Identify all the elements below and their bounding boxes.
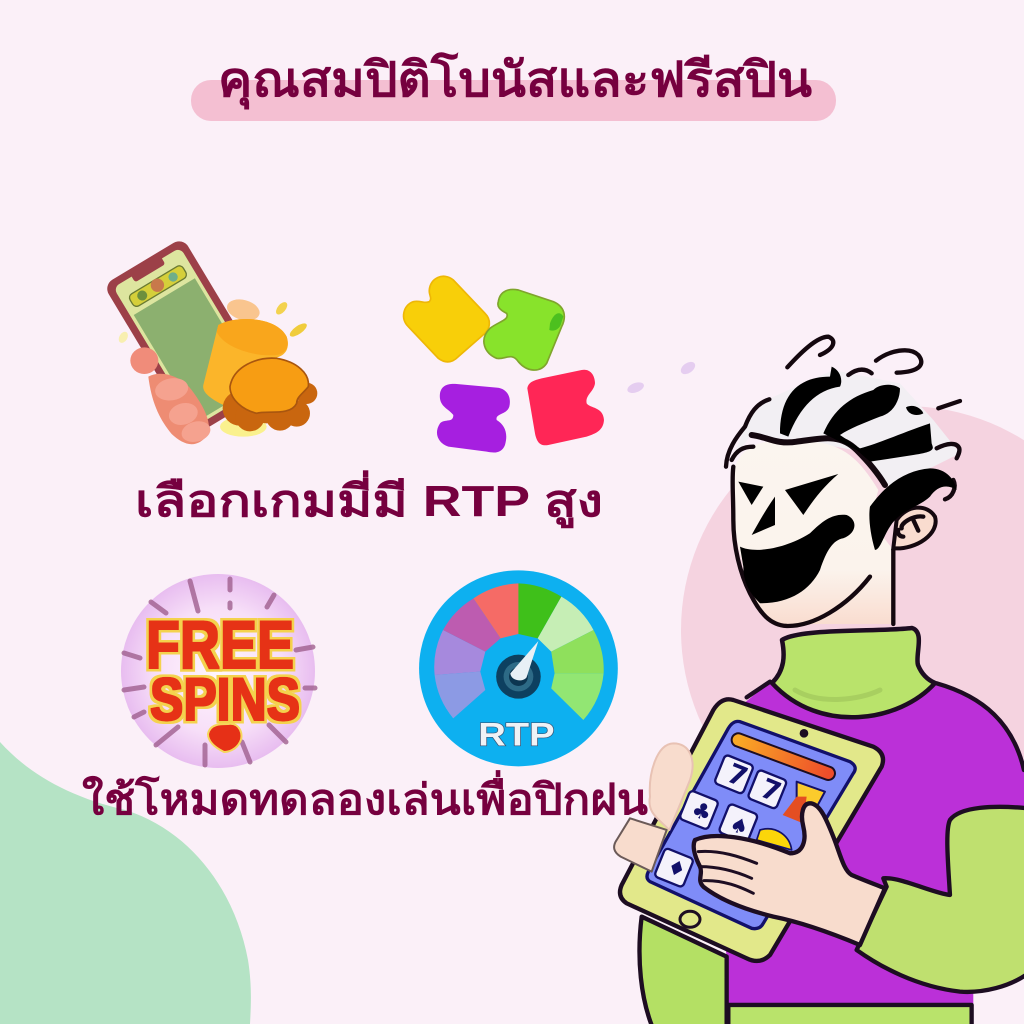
tablet: 7 xyxy=(756,773,785,809)
icon: phone with coins xyxy=(103,237,317,445)
head with stylised hair and face xyxy=(726,337,960,626)
decorative green blob xyxy=(0,742,251,1024)
hands xyxy=(614,743,885,945)
title banner: คุณสมปิติโบนัสและฟรีสปิน xyxy=(218,51,812,110)
tablet: ♣ xyxy=(688,797,715,828)
tablet: ♦ xyxy=(664,854,690,883)
icon: free spins badge xyxy=(121,574,315,768)
tablet: 7 xyxy=(723,758,752,794)
label: use demo mode to practise: ใช้โหมดทดลองเล่นเพื่อปิกฝน xyxy=(82,770,648,823)
illustration: character holding tablet xyxy=(614,337,1024,1024)
icon: RTP gauge: RTP xyxy=(478,717,555,753)
title banner xyxy=(191,51,836,121)
turtleneck collar xyxy=(772,628,935,717)
decorative pink circle xyxy=(681,406,1024,854)
icon: free spins badge: FREE xyxy=(146,607,294,683)
icon: RTP gauge xyxy=(419,570,618,766)
tablet: ♠ xyxy=(726,812,752,841)
icon: colourful puzzle blocks xyxy=(404,276,697,453)
tablet xyxy=(620,699,883,961)
label: pick high RTP games: เลือกเกมมี่มี RTP สูง xyxy=(135,470,603,528)
icon: free spins badge: SPINS xyxy=(150,666,300,733)
body and sweater xyxy=(639,682,1024,1024)
